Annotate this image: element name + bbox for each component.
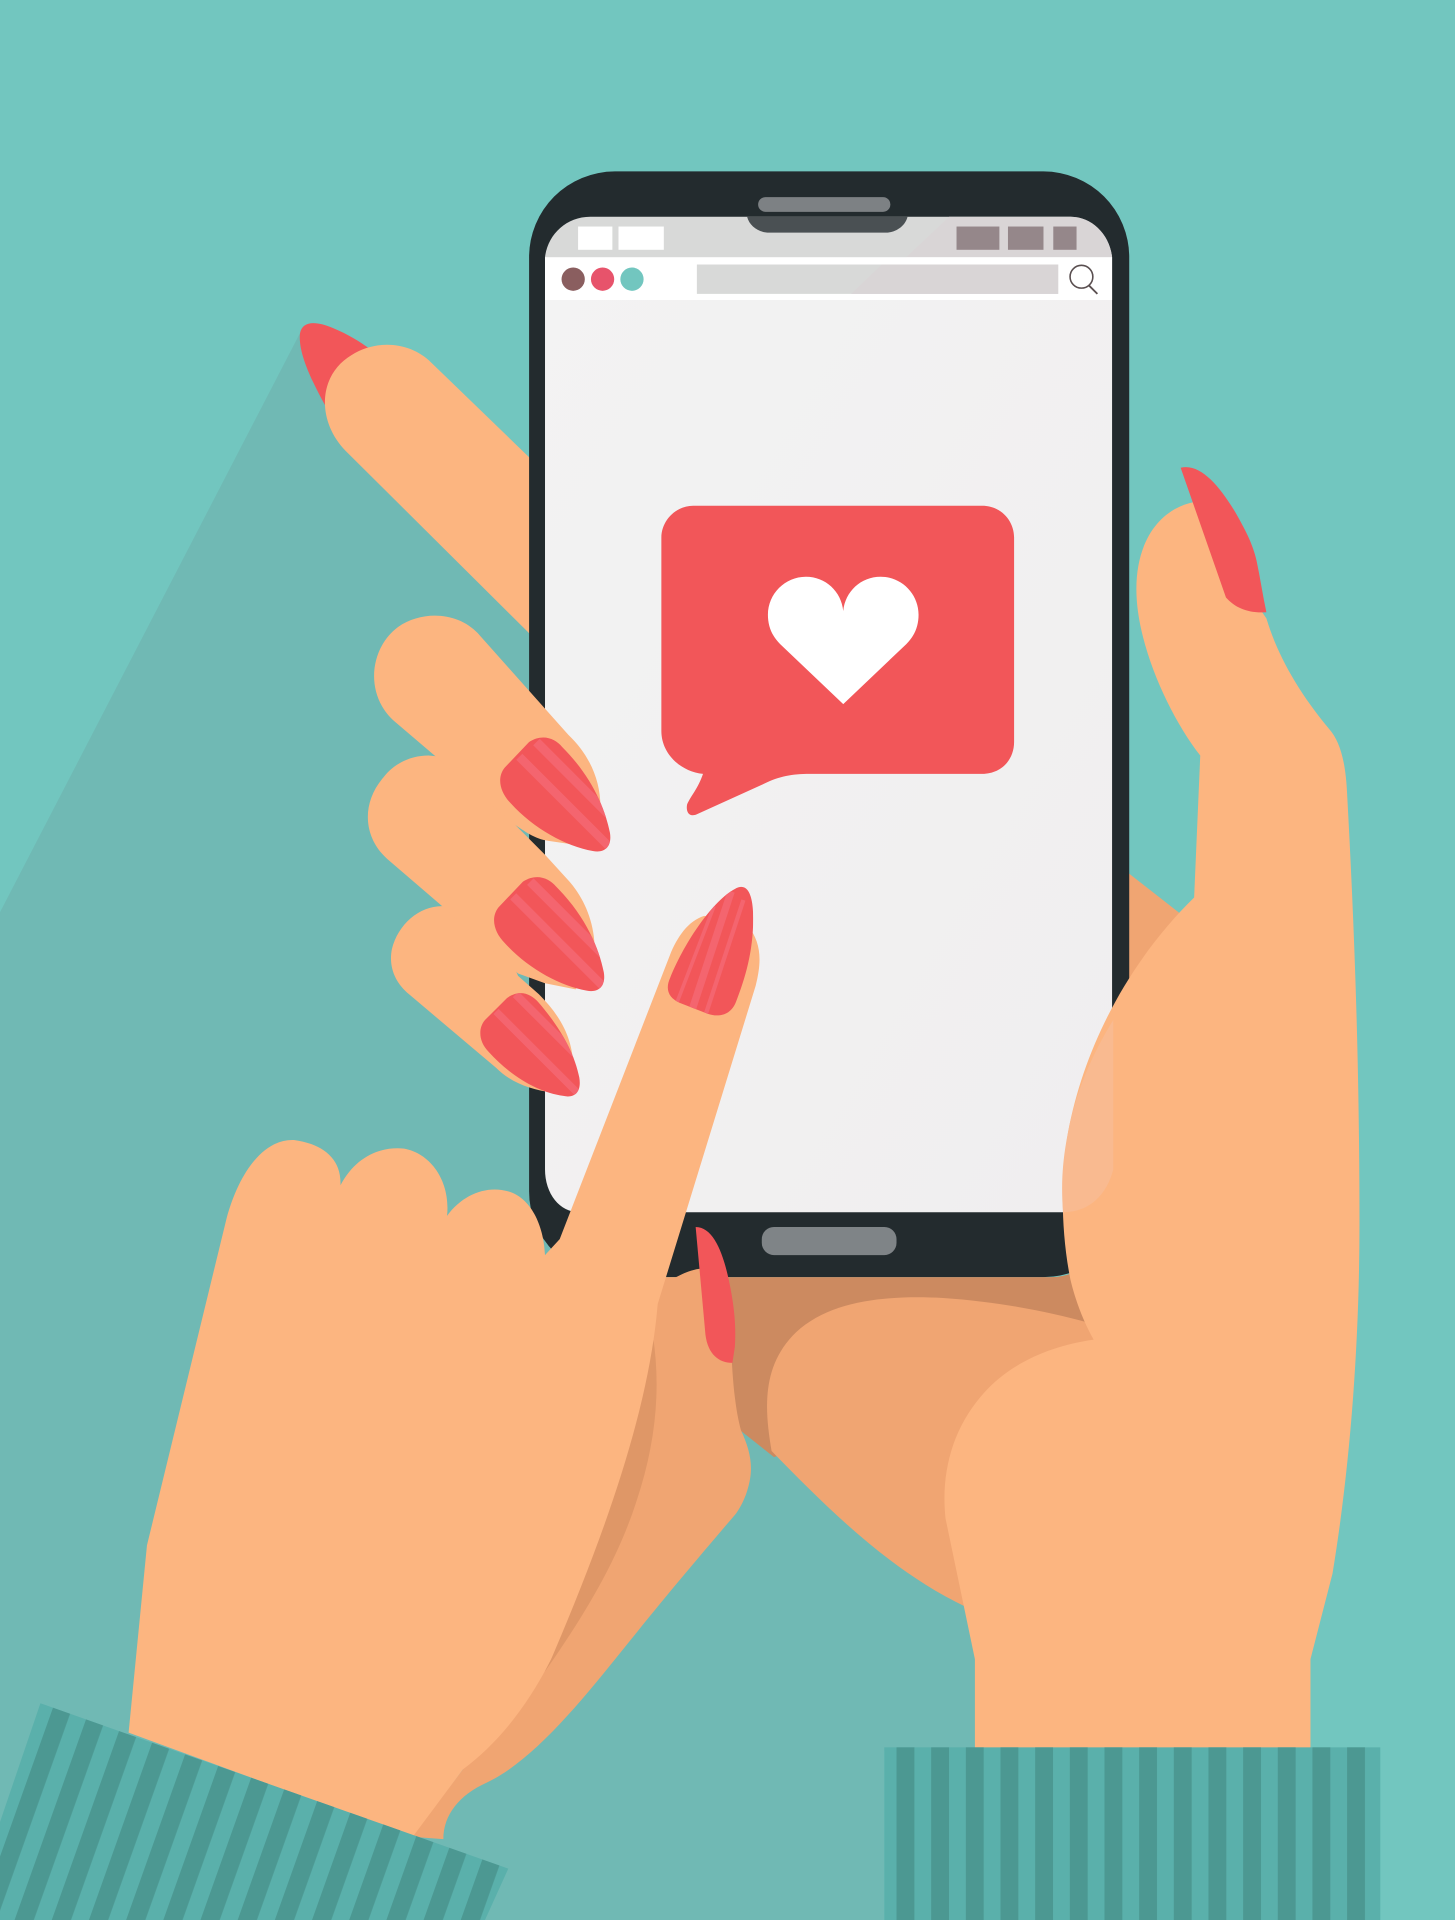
screen [545, 257, 1112, 1212]
left sleeve [0, 1703, 508, 1920]
status icons left [578, 227, 664, 250]
index nail with stripes [668, 886, 754, 1016]
long diagonal shadow [0, 333, 980, 1920]
back finger nail [300, 323, 370, 407]
finger [374, 616, 600, 845]
finger [391, 906, 573, 1092]
curled finger 1 [374, 616, 618, 857]
thumb nail [696, 1227, 735, 1363]
phone body [529, 171, 1129, 1277]
hand and index finger [129, 916, 760, 1837]
nail with stripes [500, 738, 610, 852]
left hand back thumb [412, 1269, 751, 1839]
right hand and thumb [944, 502, 1359, 1751]
icon: heart [768, 577, 919, 704]
curled finger 3 [391, 906, 590, 1102]
address field [697, 264, 1058, 294]
thumb shadow [545, 1335, 657, 1671]
nail with stripes [494, 877, 604, 992]
browser bar [545, 257, 1112, 300]
front left hand [129, 882, 760, 1837]
speaker [758, 197, 890, 212]
nail with stripes [480, 993, 580, 1096]
thumb nail [1181, 467, 1266, 612]
back finger [325, 345, 545, 649]
palm edge behind phone [1121, 867, 1194, 1102]
status bar tint [906, 217, 1112, 257]
right hand underside finger [767, 1297, 1102, 1611]
shadow below phone [676, 1272, 1094, 1457]
notch [747, 217, 908, 233]
right sleeve [884, 1747, 1380, 1920]
bubble [661, 506, 1014, 815]
browser dots [562, 268, 644, 291]
home button [762, 1227, 897, 1255]
like speech bubble [661, 506, 1014, 815]
finger [368, 756, 595, 989]
right hand [944, 467, 1359, 1751]
status icons right [957, 227, 1077, 250]
phone [529, 171, 1129, 1277]
thumb translucent overlay [1062, 1020, 1113, 1212]
icon: search [1070, 265, 1097, 294]
curled finger 2 [368, 756, 612, 997]
status bar [545, 217, 1112, 257]
